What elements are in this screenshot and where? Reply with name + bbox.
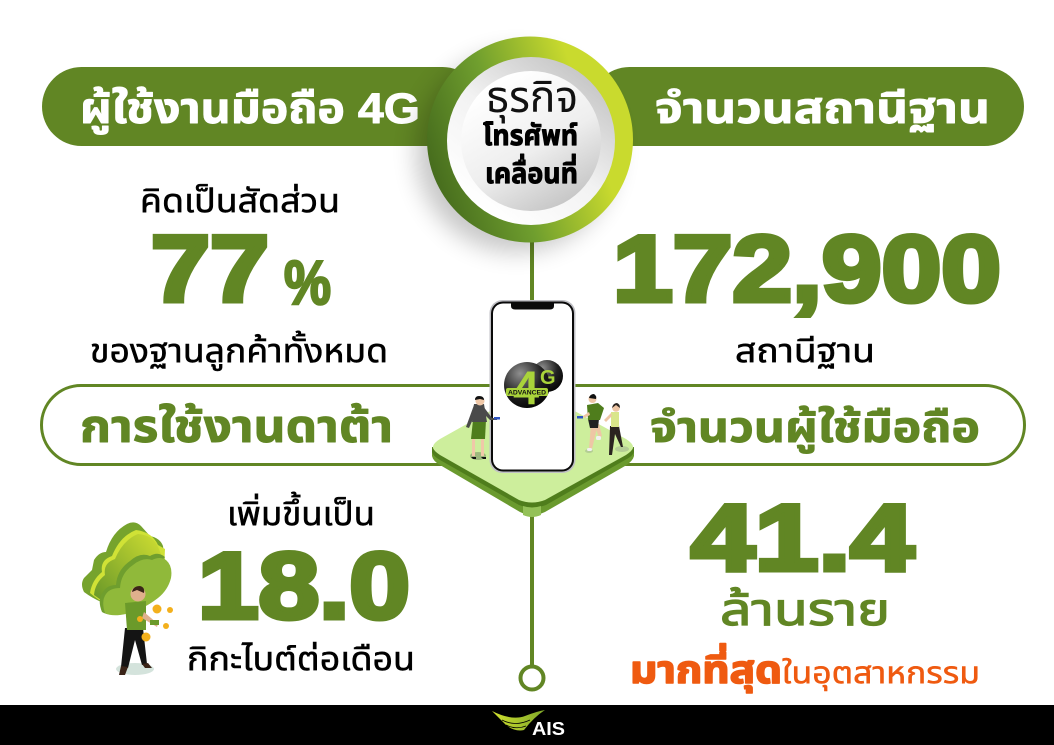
text block: 172,900 base stations — [613, 216, 1001, 369]
caption: stations: สถานีฐาน — [735, 332, 875, 369]
unit: million subscribers: ล้านราย — [720, 584, 890, 635]
highlight: highest in the industry: มากที่สุด — [630, 643, 782, 693]
header pill: 4G users — [42, 67, 482, 146]
platform — [432, 392, 634, 517]
percent sign: % — [284, 249, 331, 318]
caption: of total customer base: ของฐานลูกค้าทั้งหมด — [90, 330, 388, 371]
number: 77: 77 — [151, 216, 269, 321]
highlight: in the industry: ในอุตสาหกรรม — [782, 657, 980, 691]
header pill: base stations — [590, 67, 1024, 146]
logo: AIS: AIS — [532, 719, 565, 739]
heading: number of base stations: จำนวนสถานีฐาน — [655, 85, 990, 133]
logo: AIS — [492, 710, 565, 739]
figures: couple walking — [577, 394, 629, 455]
badge title line 3: เคลื่อนที่ — [485, 153, 578, 189]
logo: 4G advanced: G — [540, 367, 556, 389]
text block: 41.4 million — [630, 485, 980, 693]
footer bar — [0, 705, 1054, 745]
outlined pill: data usage and mobile users — [42, 386, 1024, 464]
text block: 18.0 GB — [187, 491, 415, 677]
center badge — [416, 36, 633, 252]
heading: number of mobile users: จำนวนผู้ใช้มือถือ — [650, 404, 980, 453]
caption: GB per month: กิกะไบต์ต่อเดือน — [187, 640, 415, 677]
icon: cloud with man and emoji — [82, 522, 173, 675]
badge title line 1: ธุรกิจ — [486, 73, 578, 124]
logo: 4G advanced — [504, 360, 563, 414]
connector line — [520, 236, 544, 690]
text block: 77 percent share — [90, 182, 388, 371]
number: 18.0: 18.0 — [198, 533, 410, 638]
logo: 4G advanced: ADVANCED — [508, 390, 546, 396]
figure: woman with phone — [466, 396, 500, 460]
text block: 77 percent share: คิดเป็นสัดส่วน — [140, 182, 340, 219]
logo: 4G advanced: 4 — [513, 361, 539, 414]
number: 41.4: 41.4 — [691, 485, 914, 590]
number: 172,900: 172,900 — [613, 216, 1001, 321]
icon: smartphone with 4G logo — [490, 300, 576, 473]
text block: 18.0 GB: เพิ่มขึ้นเป็น — [227, 491, 375, 532]
heading: data usage: การใช้งานดาต้า — [80, 401, 393, 452]
heading: 4G mobile users: ผู้ใช้งานมือถือ 4G — [80, 85, 420, 134]
badge title line 2: โทรศัพท์ — [483, 120, 578, 151]
